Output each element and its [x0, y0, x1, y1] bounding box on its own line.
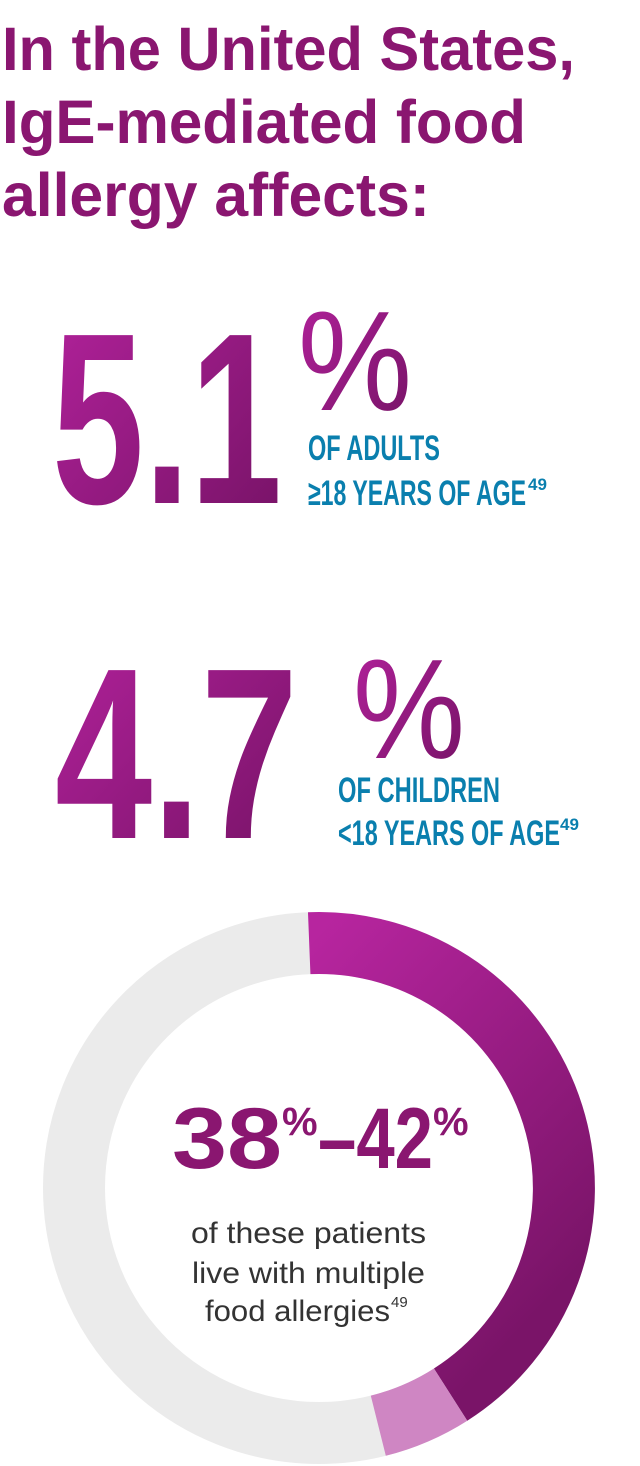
stat: children — [55, 617, 579, 890]
title — [2, 15, 575, 229]
stat: children: 4.7 — [55, 617, 298, 890]
title: IgE-mediated food — [2, 88, 526, 156]
donut center text: % — [282, 1100, 318, 1144]
title: allergy affects: — [2, 161, 430, 229]
donut center text: –42 — [318, 1091, 433, 1187]
stat: children: OF CHILDREN — [338, 771, 500, 810]
stat: children: % — [353, 630, 465, 789]
donut center text: food allergies — [205, 1295, 390, 1328]
stat: adults: OF ADULTS — [308, 429, 440, 468]
donut center text: 49 — [391, 1294, 408, 1311]
donut center text: live with multiple — [192, 1257, 425, 1290]
stat: adults — [52, 282, 547, 555]
donut chart — [74, 943, 564, 1433]
stat: adults: ≥18 YEARS OF AGE — [308, 474, 526, 513]
title: In the United States, — [2, 15, 575, 83]
stat: children: 49 — [560, 815, 579, 834]
stat: adults: 49 — [528, 475, 547, 494]
donut center text: 38 — [172, 1091, 282, 1187]
donut center text: % — [433, 1100, 469, 1144]
stat: adults: 5.1 — [52, 282, 282, 555]
donut center text — [172, 1091, 469, 1328]
stat: adults: % — [298, 282, 412, 441]
donut center text: of these patients — [191, 1217, 426, 1250]
